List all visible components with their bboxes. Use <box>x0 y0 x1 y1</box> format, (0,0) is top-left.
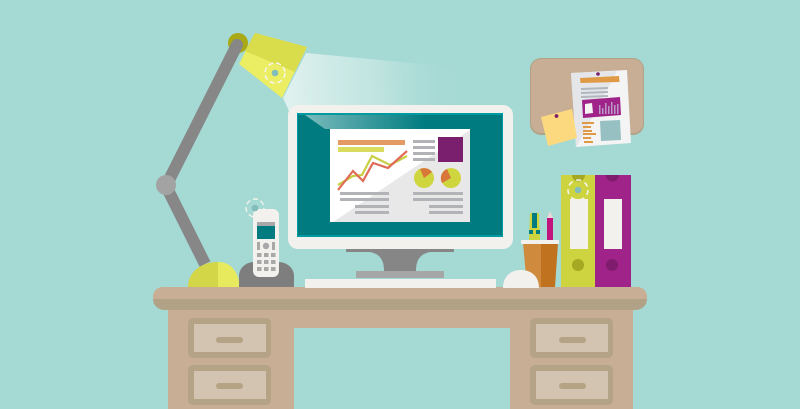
drawer left bottom <box>188 365 271 405</box>
desk lamp <box>156 33 307 287</box>
cup body <box>523 243 541 287</box>
phone indicator <box>246 199 264 217</box>
monitor <box>288 105 513 278</box>
lamp base <box>188 262 240 287</box>
text lines right <box>413 140 435 161</box>
line chart <box>338 151 407 190</box>
pen cup <box>521 211 559 287</box>
phone dock <box>239 262 294 287</box>
lamp joint <box>156 175 176 195</box>
pie chart one <box>414 168 434 188</box>
pencil <box>547 211 553 240</box>
desk legs and crossbar <box>168 305 633 409</box>
drawer right top <box>530 318 613 358</box>
pie chart two <box>441 168 461 188</box>
drawer left top <box>188 318 271 358</box>
green binder <box>561 175 595 287</box>
desk <box>153 287 647 409</box>
lamp shade <box>239 33 307 98</box>
keyboard <box>305 279 496 288</box>
board <box>530 58 644 135</box>
cup rim <box>521 240 559 244</box>
phone screen <box>257 222 275 239</box>
purple binder <box>595 175 631 287</box>
handset <box>253 209 279 277</box>
light beam <box>283 53 465 200</box>
screen <box>297 113 503 237</box>
desk top <box>153 287 647 310</box>
document on screen <box>330 129 470 222</box>
lamp arms <box>166 45 237 264</box>
document headings <box>338 140 405 145</box>
pin board <box>530 58 644 147</box>
purple block <box>438 137 463 162</box>
cordless phone <box>239 199 294 287</box>
pinned report <box>571 70 631 147</box>
monitor stand <box>346 249 454 278</box>
sticky note <box>541 109 577 146</box>
monitor frame <box>288 105 513 249</box>
mouse <box>503 270 539 288</box>
screen glare <box>305 115 430 129</box>
drawer right bottom <box>530 365 613 405</box>
text lines bottom <box>340 192 463 214</box>
phone keypad <box>257 242 276 271</box>
lamp knob <box>228 33 248 53</box>
highlighter <box>529 213 540 240</box>
